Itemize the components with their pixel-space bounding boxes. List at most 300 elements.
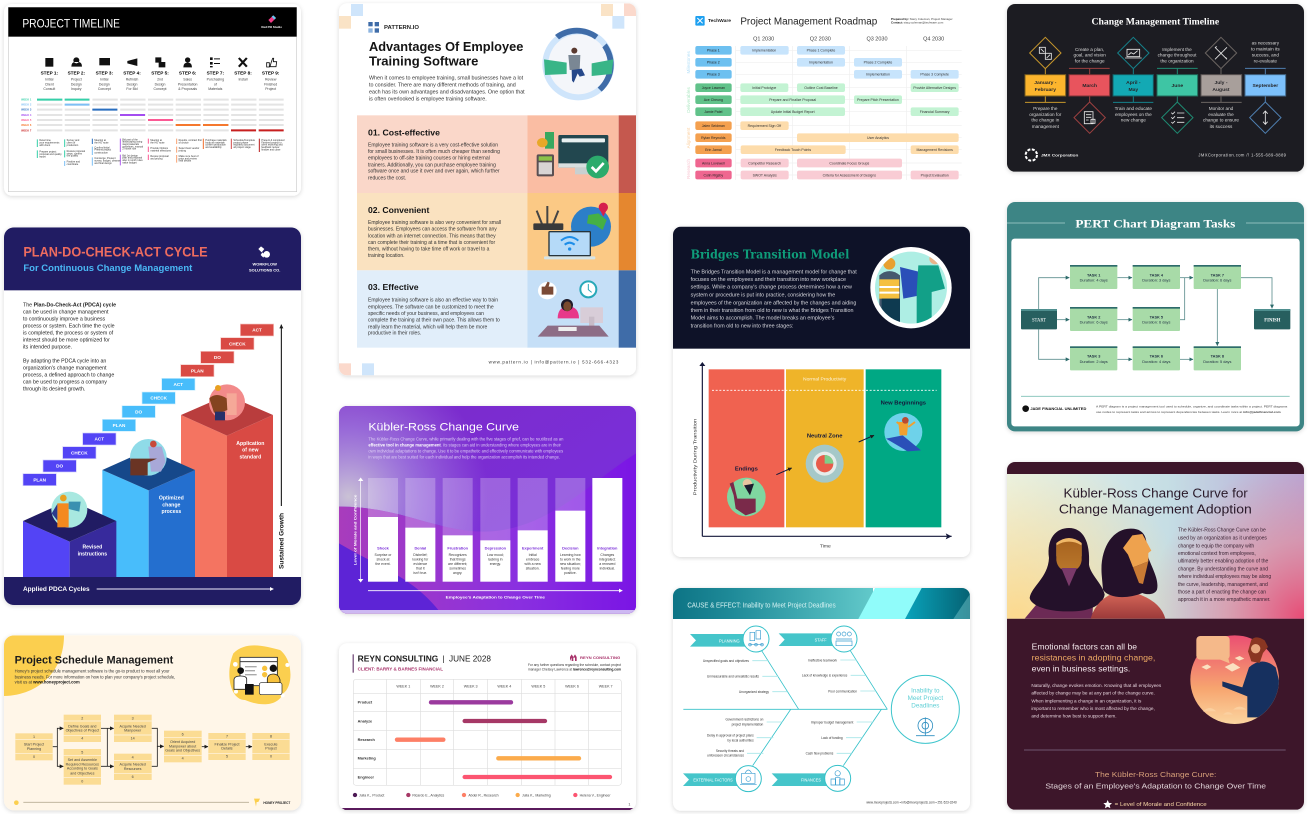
panel: Reyn Consulting gantt [339,643,636,810]
task notes: of choice [179,141,189,144]
title [1059,485,1252,516]
gantt bars [397,702,610,777]
legend: Abdel R., Research [468,793,499,797]
stage descriptions: integrated; [599,558,616,562]
box labels: 4 [182,757,184,761]
task notes: final details [179,160,192,163]
stage descriptions: Changes [600,553,615,557]
pillar: purple: Revised [82,545,102,551]
footer band [4,577,301,605]
task notes: project phase [233,141,249,144]
step labels: STEP 7: [207,70,225,75]
effect circle: Inability to [911,687,940,694]
title: Training Software [369,54,478,68]
task notes: Meeting at [150,139,162,142]
task notes: landscaping using [122,141,143,144]
quarter headers: Q1 2030 [753,37,774,43]
client line: CLIENT: BARRY & BARNES FINANCIAL [358,667,443,672]
step labels: PLAN [33,477,47,482]
section 3: effective: specific needs of your business, and employees can [368,311,484,317]
row labels: Analyze [358,719,372,723]
task notes: Provide Options [150,147,169,150]
cause labels [703,658,857,758]
research bars [741,159,959,179]
task notes: Results, contract first [179,139,202,142]
ribbon labels: STAFF [815,637,827,642]
box dividers [15,721,290,777]
icon: router, globe, wifi laptop [533,203,611,259]
step labels: STEP 3: [96,70,114,75]
bar labels: Prepare and Finalize Proposal [769,98,816,102]
stage descriptions: sometimes [449,567,466,571]
header band [673,588,970,619]
milestone descriptions: Prepare the [1033,106,1058,111]
step boxes: revised [23,433,116,486]
month boxes [1025,75,1286,96]
owner labels: Rylan Reynolds [701,136,726,140]
week labels: WEEK 5 [21,118,32,122]
intro text: each has its own advantages and disadvantages. One option that [369,89,525,95]
task notes: guidelines, manual [122,145,143,148]
description: them in their transition from old to new is what the Bridges Transition [691,308,853,314]
task notes: production [67,144,79,147]
cause labels: Government restrictions on [725,717,764,721]
schedule boxes [15,715,290,785]
step descriptions: Materials [208,87,223,91]
connectors [53,728,252,766]
bar labels [748,49,956,177]
cause labels: Poor communication [828,689,857,693]
bar labels: Provide Alternative Designs [913,86,956,90]
step descriptions: Sales [183,78,192,82]
icon: person at desk [538,281,609,337]
week headers: WEEK 4 [497,684,511,688]
stage descriptions: that it [416,567,425,571]
task labels: Duration: 6 days [1080,321,1108,325]
intro text: is completed, the process or system of [23,331,114,337]
milestone descriptions: change to ensure [1203,118,1239,123]
subtitle: For Continuous Change Management [23,263,192,273]
task notes: client receiving and [261,144,283,147]
icon: computer and check [537,132,609,178]
bar labels: Criteria for Assessment of Designs [823,173,876,177]
step descriptions: Initial [100,78,109,82]
bar tracks [368,478,585,582]
step descriptions: Project [71,78,82,82]
step labels: PLAN [191,369,204,374]
milestone bars [740,46,959,79]
bar labels: Outline Cost Baseline [804,86,838,90]
worker illustration 2 [130,439,167,476]
task labels: Duration: 2 days [1080,360,1108,364]
week labels: WEEK 7 [21,128,32,132]
task labels: TASK 1 [1087,273,1101,277]
stage descriptions: energy. [490,562,501,566]
task notes: steps/materials [122,143,140,146]
stage descriptions: with a new [525,562,541,566]
cause labels: Unorganized strategy [739,690,769,694]
heading [358,654,491,664]
task labels: Duration: 6 days [1203,279,1231,283]
milestone descriptions: Monitor and [1209,106,1234,111]
title: Kübler-Ross Change Curve [368,422,519,434]
footer contact: www.pattern.io | info@pattern.io | 532-666-4323 [489,360,619,365]
description: The Bridges Transition Model is a management model for change that [691,269,857,275]
workflow logo: WORKFLOW [252,261,277,266]
cause labels: Unmeasurable and unrealistic results [707,674,759,678]
milestone descriptions: goal, and vision [1073,53,1106,58]
task notes: report [39,155,46,158]
box labels: Execute [264,742,278,746]
task labels: TASK 5 [1150,315,1164,319]
stage names: Decision [562,545,579,550]
task notes: Select best vendor [179,147,199,150]
box labels: Finalize Project [214,742,239,746]
intro text: can be used in change management [23,310,109,316]
header band [4,227,301,290]
description: used by an organization as it undergoes [1178,536,1267,542]
step labels: CHECK [229,341,246,346]
ribbon labels [693,637,827,783]
owner labels: Phase 2 [707,61,720,65]
bar labels: Prepare Pitch Presentation [857,98,899,102]
title: Project Management Roadmap [740,16,878,27]
growth label: Sustained Growth [279,513,286,569]
task notes: 2 month rule [122,148,137,151]
box labels: 4 [81,737,83,741]
milestone descriptions: organization for [1029,112,1062,117]
legend star [1103,800,1112,808]
step boxes: optimized [102,378,195,431]
panel: Kübler-Ross change management adoption [1007,462,1304,810]
description: Model aims to accomplish. The model breaks an employee's [691,316,835,322]
stage names: Frustration [447,545,469,550]
panel: project management roadmap [686,16,962,180]
finish node: FINISH [1264,319,1281,324]
task notes: steps, confirm [67,152,82,155]
task notes: survey, budget, cleanse [94,159,121,162]
description: where individual employees may be along [1178,574,1271,580]
step labels: STEP 5: [151,70,169,75]
step labels: ACT [174,382,183,387]
footer text: A PERT diagram is a project management tool used to schedule, organize, and coordinate tasks within a project. PERT diagrams [1096,405,1288,409]
box labels: 4 [132,755,134,759]
milestone descriptions: to maintain its [1251,47,1280,52]
section 3: effective [368,283,500,337]
side labels: Research [686,159,691,179]
task labels: Duration: 3 days [1142,279,1170,283]
box labels: 6 [132,775,134,779]
heading: | [442,654,445,664]
pillar: purple: instructions [78,551,107,557]
section 3: effective: productive in their roles. [368,331,421,337]
reyn logo: REYN CONSULTING [580,655,620,660]
milestone descriptions: employees on the [1115,112,1152,117]
description: transition from old to new into three stages: [691,323,793,329]
step descriptions: Review [265,78,277,82]
task notes: Schedule/Complete [233,139,256,142]
section 3: effective: 03. Effective [368,283,419,292]
task notes: regularly document [233,144,255,147]
task notes: Purchase materials [205,139,227,142]
pattern logo [368,22,419,33]
task notes: and final design [94,162,112,165]
milestone descriptions: its success [1210,124,1233,129]
week headers: WEEK 2 [430,684,444,688]
footer arrow [97,587,273,591]
supporting text [1031,683,1162,719]
row labels: Research [358,738,376,742]
category icons [735,626,857,792]
box labels: Details [221,746,233,750]
task notes: value budget [122,161,137,164]
section 1: cost-effective: trainers. Additionally, you can purchase employee training [368,162,496,168]
description [1178,528,1271,603]
title: Bridges Transition Model [691,248,850,262]
week labels: WEEK 2 [21,103,32,107]
prepared by: Prepared by: Stacy Coleman, Project Manager [891,17,953,21]
fishbone [683,651,887,766]
divider [1024,748,1286,751]
description: employees of the organization are affected by the changes and aiding [691,300,856,306]
milestone descriptions [1029,41,1280,129]
footer rule [1021,395,1290,398]
task notes: Finalize and [67,161,81,164]
supporting text: important to remember who is most affected by the change, [1031,706,1155,711]
effect circle: Meet Project [908,695,943,702]
task notes: finalize and close [261,148,281,151]
task notes: Concierge: Present [94,157,116,160]
owner labels: Erin Jamal [705,148,722,152]
step labels: STEP 6: [179,70,197,75]
stage names: Depression [485,545,507,550]
owner labels: Joyce Lawman [702,86,725,90]
cause labels: by local authorities [728,738,754,742]
section 1: cost-effective: software once and use it over and over again, which further [368,169,500,175]
step labels: STEP 1: [41,70,59,75]
task notes: the HO route [150,141,165,144]
task notes: Review proposal [150,155,169,158]
stage labels [735,401,926,472]
description [15,669,175,685]
subheading: even in business settings. [1032,664,1130,674]
intro text: The Plan-Do-Check-Act (PDCA) cycle [23,303,116,309]
description: the curve, leadership, management, and [1178,582,1268,588]
step labels: STEP 8: [234,70,252,75]
bar labels: Feedback Touch Points [775,148,811,152]
box labels: 3 [132,716,134,720]
task notes: with client [39,144,51,147]
task notes: proposal and quality [39,153,62,156]
stage descriptions: Initial [529,553,537,557]
bar labels: Project Evaluation [921,173,949,177]
owner labels: Ace Cheung [704,98,723,102]
title rules [1007,222,1304,224]
ribbon labels: PLANNING [719,638,740,643]
panel: PDCA cycle [4,227,301,605]
step labels: DO [135,409,143,414]
workflow logo [249,246,280,272]
task labels: TASK 6 [1150,355,1163,359]
panel: Kübler-Ross change curve [339,406,636,613]
step labels: PLAN [113,423,126,428]
step labels [33,328,262,482]
description: in ways that are best suited for each individual and help the organization accomplish its intended change. [368,455,560,460]
jmx logo [1026,149,1079,161]
month labels: April - [1126,80,1141,86]
subheading: resistances in adopting change, [1032,653,1155,663]
legend text: = Level of Morale and Confidence [1115,802,1207,808]
description: The Kübler-Ross Change Curve, while primarily dealing with the five stages of grief, can be reutilized as an [368,437,564,442]
side labels: Alignment [686,127,691,148]
side labels: Milestones [686,51,691,73]
accent rule [352,654,355,673]
title: PERT Chart Diagram Tasks [1075,217,1236,231]
step descriptions: Finished [264,82,277,86]
contact note [528,663,621,672]
box labels: Orient Acquired [170,740,195,744]
task notes: Prepare project [39,151,57,154]
step labels: CHECK [150,396,168,401]
stage descriptions: Recognizes [449,553,467,557]
contact note: manager Chelsey Lawrence at lawrence@reynconsulting.com [528,668,621,672]
step descriptions: Install [238,78,248,82]
task notes: Survey and [67,139,80,142]
milestone descriptions: Implement the [1162,47,1192,52]
intro text: to continuously improve a business [23,317,106,323]
illustration: endings [727,478,766,516]
month labels [1034,80,1278,93]
header bar [8,7,297,37]
intro text: interest should be more optimized for [23,338,110,344]
techware logo: TechWare [708,18,732,23]
description: focuses on the employees and their transition into new workplace [691,277,846,283]
section 2: convenient: location with an internet connection. This means that they [368,233,496,239]
cause labels: unforeseen circumstances [707,754,744,758]
box labels: Start Project [24,743,44,747]
prepared by [891,17,953,25]
week headers: WEEK 3 [464,684,478,688]
step labels: DO [56,464,64,469]
description: emotional context from employees, [1178,551,1256,557]
step labels [41,70,280,75]
intro text: When it comes to employee training, small businesses have a lot [369,75,524,81]
stage descriptions: Disbelief; [413,553,427,557]
illustration: new beginnings [884,413,922,451]
stage descriptions: shock at [377,558,389,562]
transition arrows [776,435,874,475]
box labels: 1 [33,735,35,739]
section 3: effective: really learn the material, which will help them be more [368,324,488,330]
stage descriptions: the event. [375,562,391,566]
quarter headers: Q2 2030 [810,37,831,43]
task notes: material selections [150,149,172,152]
task notes: and availability [205,146,222,149]
box labels: Objectives of Project [66,728,99,732]
section 1: cost-effective: 01. Cost-effective [368,128,441,137]
bottom accent [342,808,633,810]
contact note: For any further questions regarding the schedule, contact project [528,663,621,667]
gantt table [353,679,621,785]
section 2: convenient: businesses. Employees can access the software from any [368,227,497,233]
start node: START [1032,319,1046,324]
description: those a part of enacting the change can [1178,589,1266,595]
bar labels: Coordinate Focus Groups [829,161,870,165]
category glyphs [740,631,852,785]
bar labels: Implementation [866,73,890,77]
owner labels: Phase 1 [707,49,720,53]
task notes: the HO route [94,141,109,144]
task notes: confirm production [205,144,226,147]
step descriptions: of [214,82,217,86]
description: business needs. For more information on how to plan your company's project schedule, [15,674,175,679]
stage descriptions: positive. [564,571,577,575]
month labels: March [1082,83,1097,89]
section 2: convenient: can complete their training at a time that is convenient for [368,240,495,246]
step labels: ACT [95,437,104,442]
section 2: convenient: 02. Convenient [368,206,430,215]
growth arrow [280,325,283,506]
step descriptions: Refinish [126,78,138,82]
task labels: Duration: 5 days [1203,360,1231,364]
week labels: WEEK 6 [21,123,32,127]
description [691,269,857,329]
week labels: WEEK 3 [21,108,32,112]
task labels: TASK 4 [1150,273,1164,277]
stage bars [368,478,622,582]
bar labels: Requirement Sign Off [748,124,781,128]
footer contact: JMXCorporation.com // 1-555-689-8889 [1198,153,1287,158]
task notes: Bid part of the [122,138,138,141]
task notes: all project stage [233,146,251,149]
title: Project Schedule Management [15,654,174,666]
task notes: coordinate [67,163,79,166]
bar labels: Financial Summary [920,110,950,114]
reyn logo [570,654,620,661]
task notes: the quality [67,155,79,158]
box labels: Required Resources [66,762,99,766]
white inner panel [1011,239,1300,426]
step descriptions [43,78,277,91]
stage descriptions: a renewed [599,562,615,566]
step descriptions: Presentation [178,82,198,86]
step labels: ACT [252,328,262,333]
box labels: Manpower about [169,744,196,748]
description: approach it in a more empathetic manner. [1178,597,1271,603]
stage labels: Neutral Zone [807,434,843,440]
milestone descriptions: evaluate the [1208,112,1234,117]
step descriptions: Initial [45,78,54,82]
intro text: can be used to progress a company [23,379,107,385]
step descriptions: Design [155,82,165,86]
task notes: your requirements [39,141,60,144]
cause labels: Cash flow problems [806,752,834,756]
bar labels: Initial Prototype [752,86,776,90]
stage columns [709,369,941,527]
yellow corner shape [4,635,64,696]
box labels: Define Goals and [68,724,96,728]
heading: JUNE 2028 [449,654,491,664]
studio logo: Red Pill Studio [261,25,282,29]
step descriptions: Inquiry [71,87,82,91]
page number: 1 [628,802,630,806]
panel: project timeline [4,4,301,196]
bar labels: Implementation [809,61,833,65]
bar labels: Update Initial Budget Report [771,110,815,114]
illustration: handover [870,247,952,328]
box labels: and Objectives [70,771,95,775]
description: settings. While a company's change process determines how a new [691,285,852,291]
